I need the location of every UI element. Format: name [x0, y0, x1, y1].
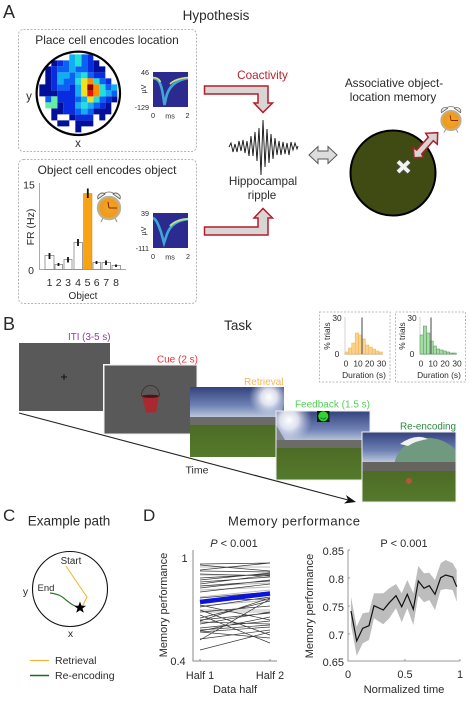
waveform plot: ms — [165, 112, 175, 120]
arena outline — [37, 52, 120, 135]
bar chart: 7 — [103, 277, 109, 289]
chart: memory performance by data half: Half 1 — [186, 670, 214, 682]
axis labels — [26, 91, 81, 150]
legend: Retrieval — [55, 655, 96, 667]
legend — [30, 655, 115, 682]
icon: small bucket — [406, 478, 412, 484]
memory arena — [350, 130, 436, 216]
waveform plot: -129 — [135, 103, 149, 112]
histogram: re-encoding duration: 30 — [452, 358, 462, 368]
bar chart — [23, 180, 126, 302]
bar chart: FR (Hz) — [25, 209, 37, 245]
path diagram — [23, 552, 108, 640]
histogram: retrieval duration: Duration (s) — [342, 370, 386, 380]
waveform plot: µV — [139, 84, 148, 93]
chart: memory performance over normalized time: 0.7 — [329, 630, 344, 642]
icon: location cross — [398, 162, 409, 172]
arrow: bidirectional ripple to memory — [309, 146, 337, 164]
screen: ITI — [19, 343, 110, 411]
histogram: re-encoding duration: 10 — [428, 358, 438, 368]
label: re-encoding: Re-encoding — [400, 422, 456, 432]
panel B label: B — [3, 314, 15, 334]
histogram: re-encoding duration: 0 — [419, 358, 424, 368]
chart: memory performance over normalized time: 0.8 — [329, 574, 344, 586]
bar chart: 2 — [56, 277, 62, 289]
histogram: retrieval duration — [320, 312, 390, 382]
mean line — [200, 594, 270, 602]
chart: memory performance over normalized time: 0.65 — [323, 657, 344, 669]
confidence band — [351, 560, 457, 656]
panel A label: A — [3, 2, 15, 22]
path diagram: Start — [61, 556, 82, 567]
legend: Re-encoding — [55, 670, 115, 682]
histogram: retrieval duration: 0 — [335, 349, 340, 359]
waveform plot: 2 — [186, 252, 190, 261]
label: associative memory: Associative object- — [345, 76, 443, 90]
histogram: retrieval duration: 20 — [365, 358, 374, 368]
histogram: retrieval duration: % trials — [322, 322, 332, 350]
bar chart: 3 — [65, 277, 71, 289]
label: ITI: ITI (3-5 s) — [68, 332, 110, 343]
waveform plot: 46 — [141, 68, 149, 77]
arrow: location to object — [413, 133, 438, 158]
screen: re-encoding — [362, 432, 462, 502]
panel: place cell — [18, 30, 196, 152]
label: retrieval: Retrieval — [244, 377, 284, 388]
arrow: place cell to ripple — [204, 86, 272, 112]
waveform plot: 39 — [141, 209, 149, 218]
re-encoding path — [50, 593, 80, 607]
icon: hippocampal ripple — [229, 120, 298, 175]
icon: alarm clock — [441, 107, 461, 133]
path diagram: x — [68, 628, 74, 640]
icon: alarm clock — [98, 192, 120, 222]
chart: memory performance over normalized time — [304, 538, 463, 696]
label: hippocampal ripple: Hippocampal — [229, 175, 297, 188]
chart: memory performance over normalized time: 1 — [457, 669, 463, 681]
screen: retrieval — [190, 387, 284, 457]
axis labels: y — [26, 91, 32, 103]
bar chart: 0 — [28, 265, 34, 277]
waveform plot: µV — [139, 226, 148, 235]
path diagram: End — [38, 583, 54, 594]
label: cue: Cue (2 s) — [157, 354, 198, 366]
label: coactivity: Coactivity — [237, 69, 288, 82]
histogram: retrieval duration: 10 — [353, 358, 363, 368]
chart: memory performance over normalized time: 0.5 — [397, 669, 413, 681]
histogram: retrieval duration: 0 — [344, 358, 349, 368]
heading: object cell: Object cell encodes object — [38, 163, 177, 177]
bar chart: 5 — [85, 277, 91, 289]
path diagram: y — [23, 586, 29, 598]
icon: smiley — [317, 411, 330, 422]
histogram: re-encoding duration: Duration (s) — [417, 370, 461, 380]
waveform plot — [135, 68, 190, 120]
chart: memory performance over normalized time: Normalized time — [364, 684, 444, 696]
histogram: re-encoding duration: 20 — [440, 358, 450, 368]
waveform plot: ms — [165, 252, 175, 262]
gray participant lines — [200, 567, 270, 612]
axis labels: x — [75, 138, 81, 150]
waveform plot: 0 — [151, 252, 155, 261]
title: memory performance: Memory performance — [228, 514, 360, 528]
heading: place cell: Place cell encodes location — [35, 33, 179, 47]
chart: memory performance over normalized time: 0 — [345, 669, 351, 681]
bar chart: 1 — [47, 277, 53, 289]
label: feedback: Feedback (1.5 s) — [295, 400, 370, 410]
waveform plot: -111 — [136, 244, 149, 253]
histogram: retrieval duration: 30 — [377, 358, 386, 368]
heat map — [39, 54, 117, 132]
chart: memory performance by data half: Half 2 — [256, 670, 284, 682]
bar chart: 6 — [94, 277, 100, 289]
chart: memory performance over normalized time: Memory performance — [304, 554, 316, 658]
title: Task: Task — [224, 318, 252, 333]
panel D label: D — [143, 506, 155, 525]
black participant lines — [200, 563, 270, 650]
label: hippocampal ripple: ripple — [248, 189, 276, 202]
chart: memory performance by data half: Data half — [213, 684, 258, 696]
fixation cross — [61, 374, 67, 380]
chart: memory performance over normalized time: 0.85 — [323, 546, 344, 558]
chart: memory performance by data half: 0.4 — [170, 656, 186, 668]
chart: memory performance by data half: 1 — [181, 553, 188, 565]
chart: memory performance by data half: Memory performance — [158, 553, 170, 657]
chart: memory performance over normalized time: P < 0.001 — [380, 538, 428, 550]
icon: red bucket — [142, 386, 160, 412]
title: example path: Example path — [28, 514, 110, 528]
screen: cue — [104, 365, 197, 434]
mean line — [351, 575, 457, 641]
label: associative memory: location memory — [350, 90, 436, 104]
bar chart: 4 — [75, 277, 81, 289]
histogram: re-encoding duration: 30 — [407, 313, 417, 323]
arrow: object cell to ripple — [204, 208, 272, 235]
waveform plot: 2 — [186, 111, 190, 120]
panel C label: C — [3, 506, 15, 525]
waveform plot — [136, 209, 190, 262]
label: time: Time — [186, 464, 209, 476]
waveform plot: 0 — [151, 111, 155, 120]
retrieval path — [66, 566, 87, 607]
title: Hypothesis: Hypothesis — [183, 8, 250, 23]
bar chart: 8 — [113, 277, 119, 289]
histogram: re-encoding duration — [396, 312, 466, 382]
chart: memory performance over normalized time: 0.75 — [323, 602, 344, 614]
chart: memory performance by data half — [158, 538, 284, 696]
panel: object cell — [18, 160, 196, 304]
bar chart: Object — [69, 291, 98, 302]
chart: memory performance by data half: P < 0.001 — [210, 538, 258, 550]
histogram: re-encoding duration: 0 — [410, 349, 415, 359]
histogram: re-encoding duration: % trials — [397, 322, 407, 350]
screen: feedback — [276, 410, 370, 480]
bar chart: 15 — [23, 180, 35, 192]
histogram: retrieval duration: 30 — [332, 313, 342, 323]
icon: location cross fill — [398, 162, 409, 172]
icon: star — [74, 602, 86, 613]
arrow: time axis — [19, 413, 356, 504]
